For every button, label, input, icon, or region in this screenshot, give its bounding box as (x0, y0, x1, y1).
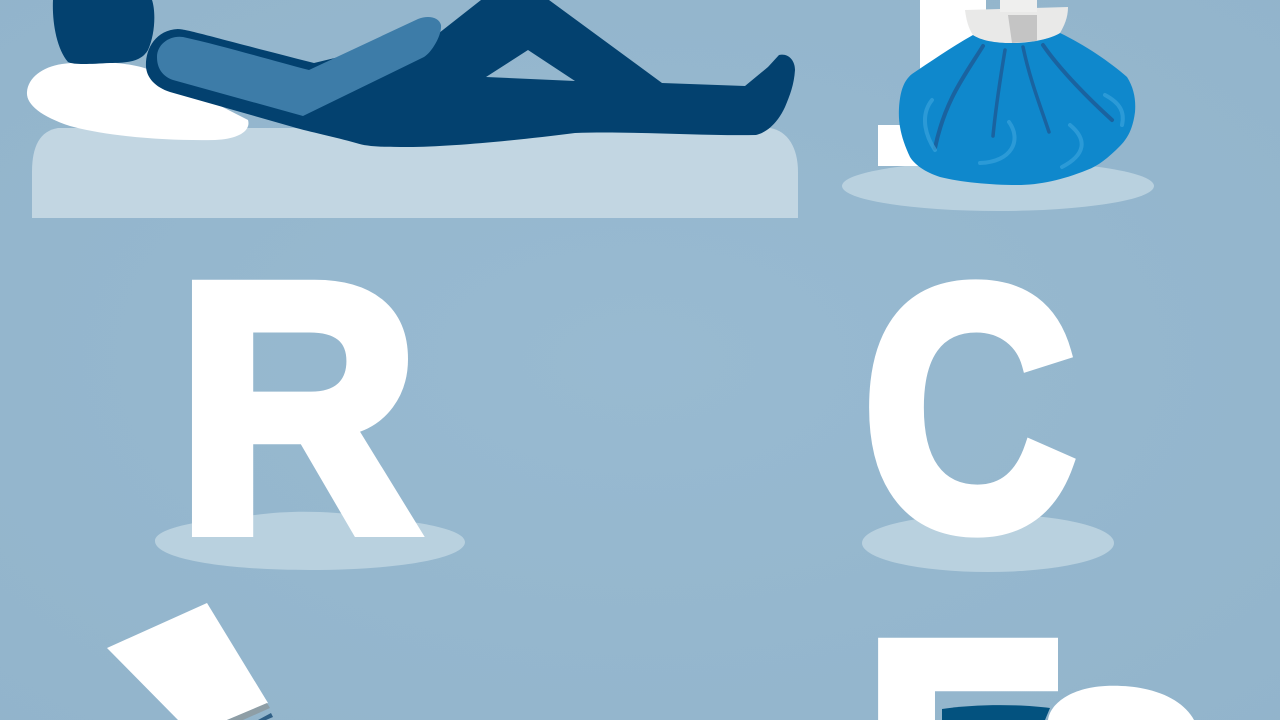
cap neck (1000, 0, 1037, 12)
tube dark stripe (258, 713, 273, 720)
letter R: R (176, 209, 420, 606)
panel: elevation, letter C (862, 216, 1114, 601)
arm (157, 17, 441, 116)
letter I fragments (878, 0, 986, 166)
C shadow ellipse (862, 514, 1114, 572)
leg on cushion (942, 705, 1050, 720)
cap shadow (1008, 15, 1037, 43)
panel: elevation, letter E and elevated foot (864, 567, 1194, 720)
panel: rest, person lying on bed (27, 0, 798, 218)
head (53, 0, 154, 64)
body and legs (146, 0, 795, 147)
panel: compression, letter R (155, 209, 465, 606)
cushion (1048, 686, 1194, 720)
panel: bandage tube, bottom left (107, 603, 273, 720)
bag highlights (925, 95, 1123, 167)
tube cap edge (227, 703, 270, 720)
ice bag (899, 0, 1135, 185)
bag cap (965, 7, 1068, 43)
shadow ellipse (842, 161, 1154, 211)
mattress (32, 128, 798, 218)
panel: ice, letter I and ice bag (842, 0, 1154, 211)
letter C: C (863, 216, 1076, 601)
bag fold lines (935, 45, 1112, 148)
tube body (107, 603, 268, 720)
pillow (27, 62, 248, 140)
R shadow ellipse (155, 512, 465, 570)
